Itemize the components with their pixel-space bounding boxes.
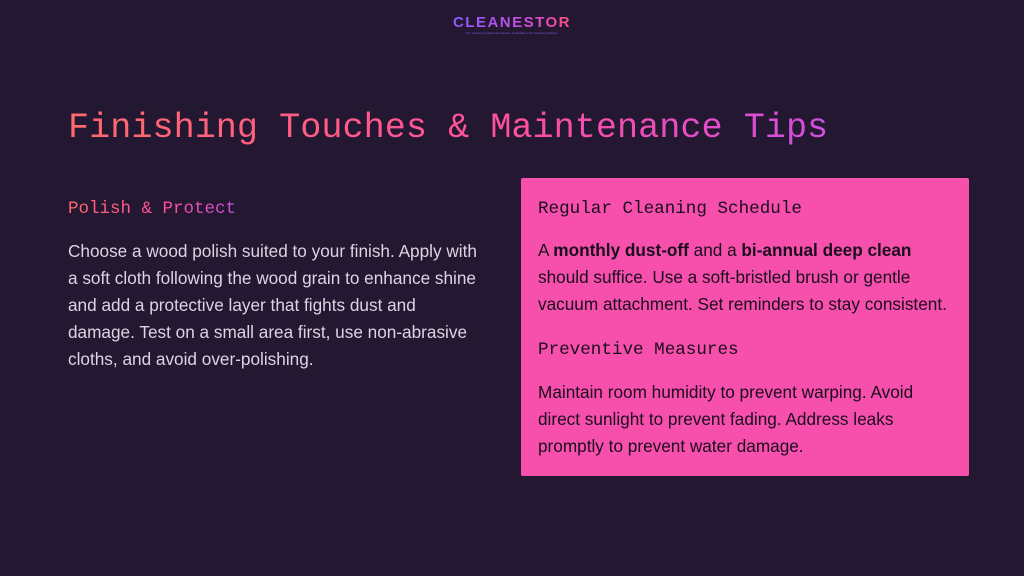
title: Finishing Touches & Maintenance Tips [68, 108, 828, 148]
logo: CLEANESTOR [453, 14, 571, 31]
logo: Pro Cleaning Guides And Service Journalism From Cleaning Nations [466, 31, 558, 35]
text: schedule: vacuum attachment. Set reminders to stay consistent. [538, 294, 947, 314]
text: polish body: a soft cloth following the wood grain to enhance shine [68, 268, 476, 288]
text: polish body: damage. Test on a small area first, use non-abrasive [68, 322, 467, 342]
text: preventive: direct sunlight to prevent fading. Address leaks [538, 409, 893, 429]
text: polish body: and add a protective layer that fights dust and [68, 295, 416, 315]
text: preventive: Maintain room humidity to prevent warping. Avoid [538, 382, 913, 402]
text: schedule: should suffice. Use a soft-bristled brush or gentle [538, 267, 910, 287]
panel: maintenance [521, 178, 969, 476]
text: polish body: cloths, and avoid over-polishing. [68, 349, 314, 369]
heading: schedule: Regular Cleaning Schedule [538, 199, 802, 219]
heading: preventive: Preventive Measures [538, 340, 739, 360]
text: preventive [538, 382, 913, 456]
text: schedule: A monthly dust-off and a bi-annual deep clean [538, 240, 911, 260]
text: polish body: Choose a wood polish suited to your finish. Apply with [68, 241, 477, 261]
subheading: polish & protect: Polish & Protect [68, 199, 236, 219]
text: preventive: promptly to prevent water damage. [538, 436, 804, 456]
text: schedule [538, 240, 947, 314]
text: polish body [68, 241, 477, 369]
